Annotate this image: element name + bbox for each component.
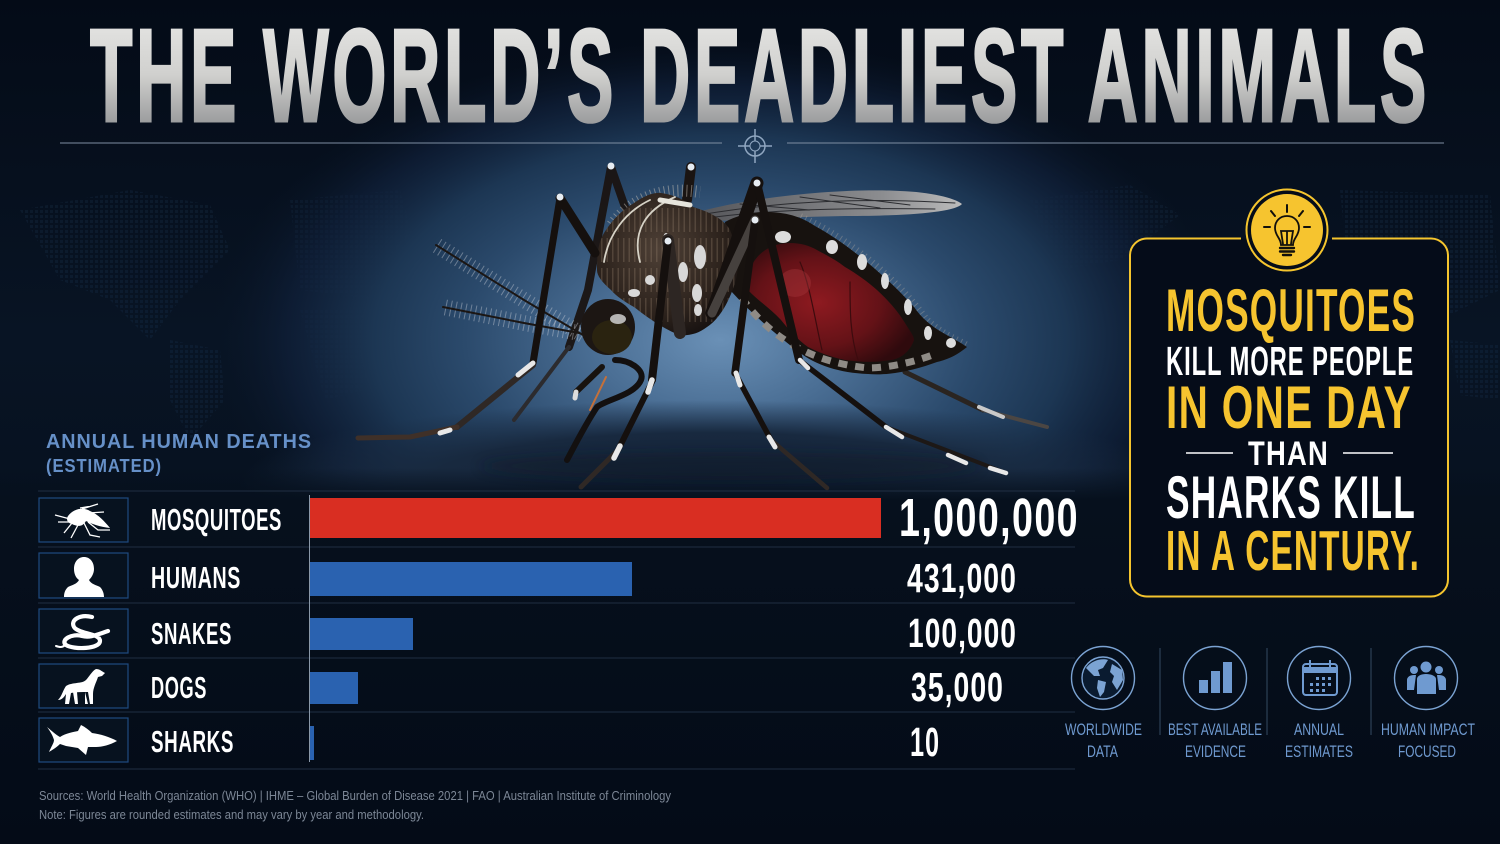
feature: worldwide data	[1065, 646, 1142, 761]
proboscis	[567, 360, 642, 460]
row: humans	[39, 553, 1017, 601]
feature: annual estimates: ANNUAL	[1294, 720, 1344, 739]
middle leg	[668, 240, 680, 333]
antennae	[436, 245, 583, 335]
icon: dog	[39, 664, 128, 708]
label: DOGS	[151, 670, 207, 705]
icon: light bulb badge	[1246, 190, 1328, 270]
value: 431,000	[907, 555, 1017, 601]
central glow	[210, 40, 1230, 640]
callout text: THAN	[1248, 435, 1329, 473]
label: SHARKS	[151, 724, 234, 759]
thorax	[590, 193, 740, 335]
abdomen white spots	[775, 231, 956, 348]
title divider with target icon	[60, 129, 1444, 163]
wing	[698, 190, 962, 222]
feature: worldwide data: WORLDWIDE	[1065, 720, 1142, 739]
label: SNAKES	[151, 616, 232, 651]
feature: best available evidence: EVIDENCE	[1185, 742, 1246, 761]
value: 10	[910, 719, 940, 765]
row: mosquitoes	[39, 488, 1079, 548]
knee tips	[556, 162, 760, 244]
feature: best available evidence	[1168, 646, 1262, 761]
label: MOSQUITOES	[151, 502, 282, 537]
row: snakes	[39, 609, 1017, 656]
world map left	[20, 190, 420, 440]
bar chart	[38, 488, 1079, 769]
row: sharks	[39, 718, 940, 765]
fade below the scene	[0, 468, 1500, 500]
feature: annual estimates: ESTIMATES	[1285, 742, 1353, 761]
bar	[310, 672, 358, 704]
value: 1,000,000	[899, 488, 1079, 548]
bar	[310, 726, 314, 760]
feature: human impact focused: FOCUSED	[1398, 742, 1456, 761]
icon: snake	[39, 609, 128, 653]
bar	[310, 618, 413, 650]
callout text	[1166, 277, 1420, 583]
chart heading	[46, 431, 312, 476]
row: dogs	[39, 664, 1004, 710]
rear legs	[514, 167, 1047, 427]
value: 35,000	[911, 664, 1004, 710]
icon: mosquito	[39, 498, 128, 542]
feature: worldwide data: DATA	[1087, 742, 1118, 761]
abdomen	[725, 212, 967, 374]
sources and note	[39, 788, 671, 822]
world map right	[1030, 185, 1500, 400]
hero mosquito illustration	[358, 162, 1047, 488]
left front leg	[560, 198, 595, 253]
thorax hairs	[612, 191, 700, 225]
icon: person	[39, 553, 128, 598]
chart heading: (ESTIMATED)	[46, 456, 162, 476]
value: 100,000	[908, 610, 1017, 656]
thorax white spots	[628, 233, 706, 316]
icon: shark	[39, 718, 128, 762]
sources and note: Note: Figures are rounded estimates and may vary by year and methodology.	[39, 807, 424, 822]
floor shadow	[480, 452, 980, 480]
label: HUMANS	[151, 560, 241, 595]
feature: human impact focused	[1381, 646, 1475, 761]
front legs	[358, 162, 1006, 488]
feature: annual estimates	[1285, 646, 1353, 761]
floor	[240, 400, 1180, 564]
chart heading: ANNUAL HUMAN DEATHS	[46, 431, 312, 453]
bar	[310, 498, 881, 538]
callout panel	[1130, 190, 1448, 596]
axis line	[308, 495, 310, 762]
bar	[310, 562, 632, 596]
feature: best available evidence: BEST AVAILABLE	[1168, 720, 1262, 739]
feature icons row	[1065, 646, 1475, 761]
mid-right leg	[712, 183, 757, 313]
head	[567, 299, 642, 460]
inner right leg	[712, 220, 755, 313]
sources and note: Sources: World Health Organization (WHO) | IHME – Global Burden of Disease 2021 | FAO | Australian Institute of Criminology	[39, 788, 671, 803]
